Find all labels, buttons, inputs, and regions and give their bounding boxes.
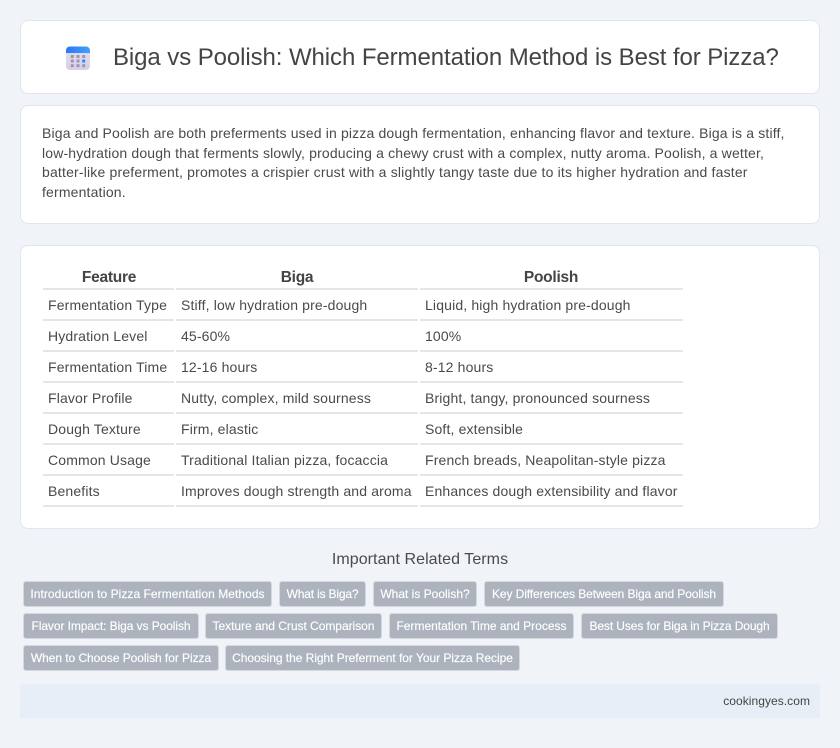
comparison table: Improves dough strength and aroma (181, 483, 412, 499)
related terms heading: Important Related Terms (332, 551, 508, 568)
comparison table: Soft, extensible (425, 421, 523, 437)
comparison table: 100% (425, 328, 461, 344)
related terms tags: Best Uses for Biga in Pizza Dough (589, 619, 770, 633)
heading: Biga vs Poolish: Which Fermentation Method is Best for Pizza? (113, 44, 779, 71)
related terms tags: What is Poolish? (380, 587, 470, 601)
related terms tags: Choosing the Right Preferment for Your Pizza Recipe (232, 651, 513, 665)
related terms tags: Fermentation Time and Process (396, 619, 567, 633)
comparison table: French breads, Neapolitan-style pizza (425, 452, 666, 468)
comparison table: Fermentation Time (48, 359, 167, 375)
related terms tags: When to Choose Poolish for Pizza (31, 651, 211, 665)
comparison table: Nutty, complex, mild sourness (181, 390, 371, 406)
intro card (20, 105, 820, 224)
comparison table: Stiff, low hydration pre-dough (181, 297, 367, 313)
comparison table: Poolish (524, 269, 578, 286)
related terms tags: What is Biga? (287, 587, 358, 601)
comparison table: Common Usage (48, 452, 151, 468)
comparison table: Feature (82, 269, 136, 286)
comparison table: Bright, tangy, pronounced sourness (425, 390, 650, 406)
comparison table: Biga (281, 269, 313, 286)
related terms tags: Key Differences Between Biga and Poolish (492, 587, 716, 601)
related terms tags: Flavor Impact: Biga vs Poolish (32, 619, 190, 633)
intro text (42, 125, 785, 200)
comparison table: Benefits (48, 483, 100, 499)
intro text: fermentation. (42, 184, 126, 200)
comparison table: Fermentation Type (48, 297, 167, 313)
related terms tags: Texture and Crust Comparison (213, 619, 374, 633)
comparison table: Hydration Level (48, 328, 148, 344)
source credit: cookingyes.com (723, 694, 810, 708)
comparison table: 8-12 hours (425, 359, 493, 375)
comparison table: Liquid, high hydration pre-dough (425, 297, 631, 313)
icon: calendar (66, 46, 90, 70)
comparison table (43, 269, 683, 507)
intro text: Biga and Poolish are both preferments used in pizza dough fermentation, enhancing flavor and texture. Biga is a stiff, (42, 125, 785, 141)
comparison table: Traditional Italian pizza, focaccia (181, 452, 388, 468)
comparison table: Flavor Profile (48, 390, 133, 406)
related terms tags (23, 581, 778, 671)
comparison table: 45-60% (181, 328, 230, 344)
intro text: low-hydration dough that ferments slowly, producing a chewy crust with a complex, nutty aroma. Poolish, a wetter, (42, 145, 764, 161)
intro text: batter-like preferment, promotes a crispier crust with a slightly tangy taste due to its higher hydration and faster (42, 164, 748, 180)
comparison table: Dough Texture (48, 421, 141, 437)
title card (20, 20, 820, 94)
comparison table: Firm, elastic (181, 421, 258, 437)
related terms tags: Introduction to Pizza Fermentation Methods (30, 587, 265, 601)
table card (20, 245, 820, 528)
comparison table: Enhances dough extensibility and flavor (425, 483, 678, 499)
footer bar (20, 684, 820, 718)
comparison table: 12-16 hours (181, 359, 257, 375)
